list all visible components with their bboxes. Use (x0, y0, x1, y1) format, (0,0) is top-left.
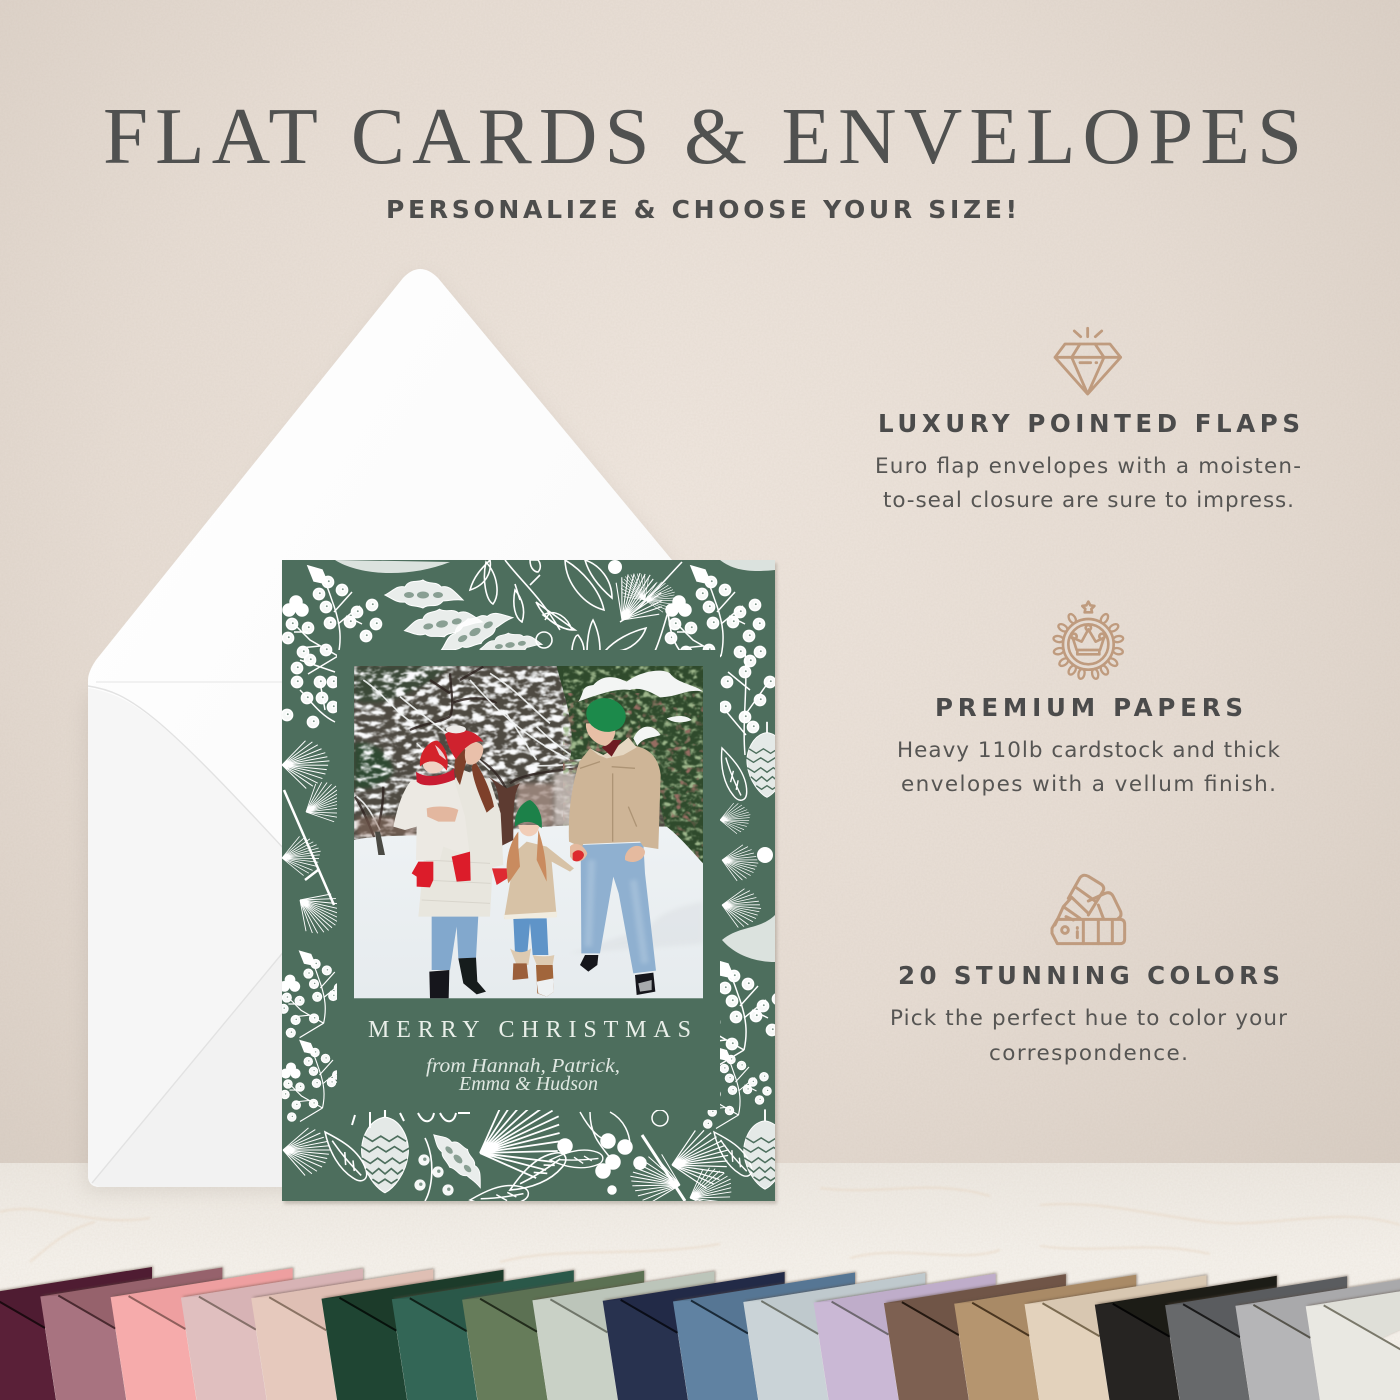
signature names (426, 1055, 620, 1095)
feature text: luxury flaps: to-seal closure are sure to impress. (883, 488, 1294, 513)
baby in red hat (393, 741, 471, 887)
man in tan jacket (569, 694, 661, 995)
merry christmas greeting: MERRY CHRISTMAS (368, 1017, 691, 1043)
feature heading: premium papers: PREMIUM PAPERS (935, 693, 1243, 722)
subtitle: PERSONALIZE & CHOOSE YOUR SIZE! (386, 195, 1017, 224)
icon: diamond (1055, 328, 1121, 394)
title: FLAT CARDS & ENVELOPES (103, 91, 1302, 181)
feature text: stunning colors: correspondence. (989, 1041, 1188, 1066)
tree trunk (488, 777, 520, 847)
feature text: luxury flaps: Euro flap envelopes with a moisten- (875, 454, 1301, 479)
feature text: stunning colors: Pick the perfect hue to color your (890, 1006, 1287, 1031)
feature heading: luxury flaps: LUXURY POINTED FLAPS (878, 409, 1300, 438)
marble counter (0, 1163, 1400, 1400)
botanical pattern (279, 560, 789, 1220)
feature text: luxury flaps (875, 454, 1301, 513)
envelope colour swatches (0, 1267, 1400, 1400)
signature names: Emma & Hudson (458, 1073, 598, 1095)
feature heading: stunning colors: 20 STUNNING COLORS (898, 961, 1280, 990)
envelope with pointed flap (86, 269, 672, 1191)
snowy trees background (354, 666, 703, 867)
icon: crown badge (1053, 602, 1124, 679)
mother in white coat (418, 725, 507, 998)
feature text: premium papers: envelopes with a vellum finish. (901, 772, 1276, 797)
girl in green hat (503, 800, 574, 997)
signature names: from Hannah, Patrick, (426, 1055, 620, 1077)
snowy ground (354, 825, 703, 998)
inner text panel (337, 650, 720, 1110)
icon: colour swatch fan (1052, 875, 1125, 944)
family photo (354, 666, 703, 998)
christmas card (279, 560, 789, 1220)
feature text: stunning colors (890, 1006, 1287, 1066)
feature text: premium papers: Heavy 110lb cardstock and thick (897, 738, 1281, 763)
feature text: premium papers (897, 738, 1281, 797)
